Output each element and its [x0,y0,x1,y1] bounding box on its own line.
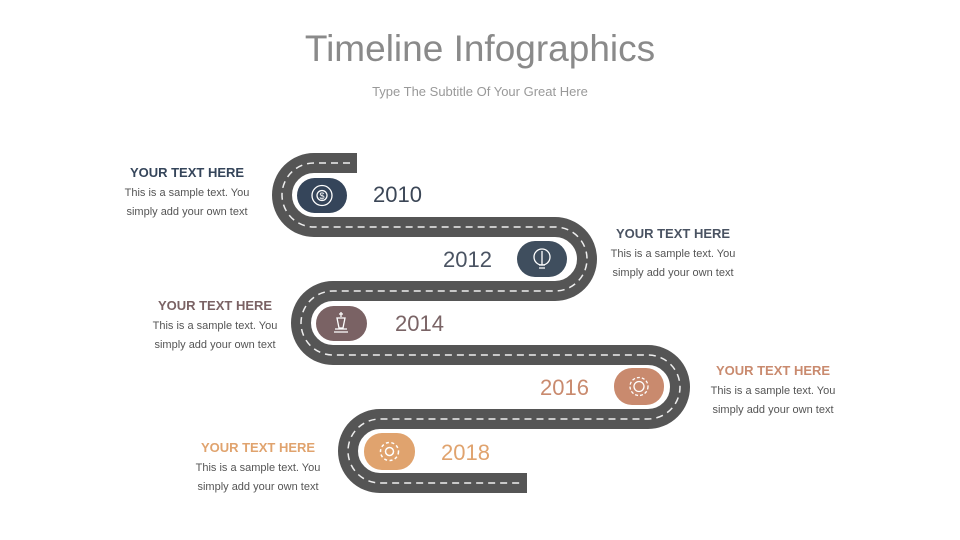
text block 2016 [710,363,835,416]
year 2012: 2012 [443,247,492,272]
text block 2010 [124,165,249,218]
text block 2014: YOUR TEXT HERE [158,298,272,313]
text block 2016: simply add your own text [712,404,834,416]
text block 2016: YOUR TEXT HERE [716,363,830,378]
text block 2012: YOUR TEXT HERE [616,226,730,241]
text block 2010: This is a sample text. You [125,187,249,199]
text block 2018: YOUR TEXT HERE [201,440,315,455]
text block 2016: This is a sample text. You [711,385,835,397]
pill: 2018 [364,433,415,470]
text block 2014: This is a sample text. You [153,320,277,332]
text block 2014: simply add your own text [154,339,276,351]
pill: 2012 [517,241,567,277]
text block 2014 [152,298,277,351]
title: Timeline Infographics [305,28,655,69]
pill: 2010: $ [319,191,325,201]
text block 2012 [610,226,735,279]
text block 2012: This is a sample text. You [611,248,735,260]
text block 2010: YOUR TEXT HERE [130,165,244,180]
year 2010: 2010 [373,182,422,207]
pill: 2010 [297,178,347,213]
subtitle: Type The Subtitle Of Your Great Here [372,84,588,99]
pill: 2014 [316,306,367,341]
year 2014: 2014 [395,311,444,336]
pill: 2016 [614,368,664,405]
year 2018: 2018 [441,440,490,465]
text block 2010: simply add your own text [126,206,248,218]
text block 2018: simply add your own text [197,481,319,493]
year 2016: 2016 [540,375,589,400]
text block 2018 [196,440,320,493]
text block 2018: This is a sample text. You [196,462,320,474]
text block 2012: simply add your own text [612,267,734,279]
